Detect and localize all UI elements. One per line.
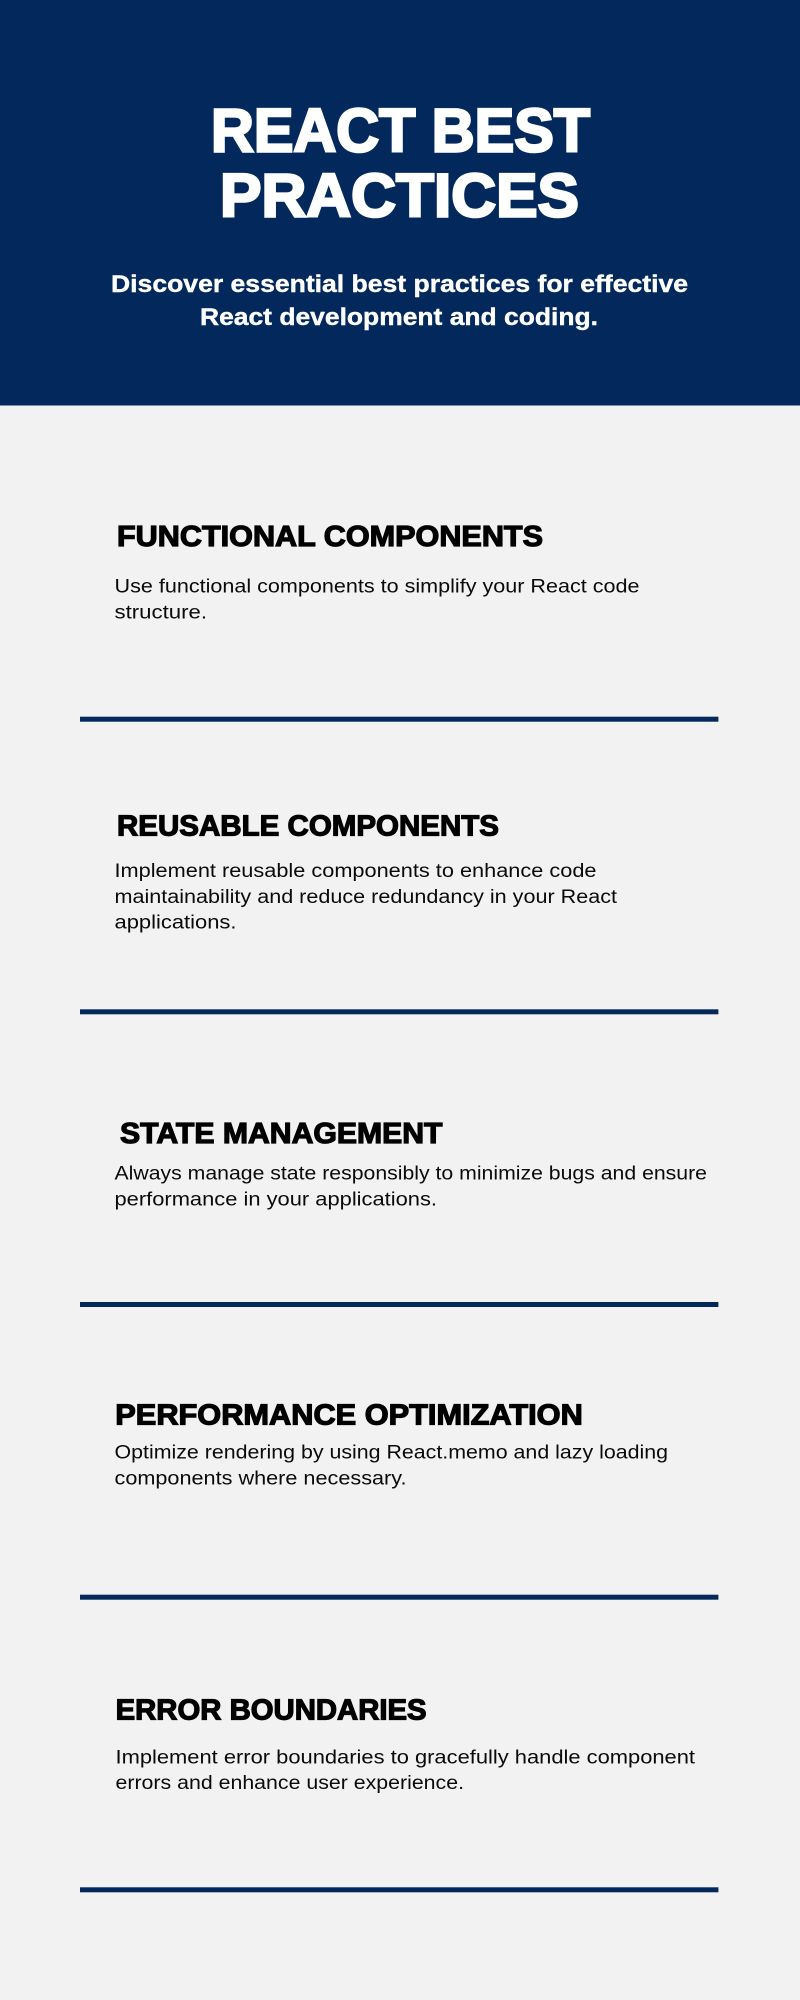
heading: performance optimization: PERFORMANCE OPTIMIZATION: [115, 1400, 583, 1432]
panel: functional components: [114, 521, 640, 623]
text: state management description: [114, 1163, 707, 1210]
subtitle: React development and coding.: [200, 304, 598, 331]
heading: functional components: FUNCTIONAL COMPONENTS: [117, 521, 543, 553]
text: performance optimization description: [114, 1442, 668, 1489]
heading: state management: STATE MANAGEMENT: [120, 1118, 443, 1150]
text: performance optimization description: Optimize rendering by using React.memo and lazy loading: [114, 1442, 668, 1463]
text: functional components description: [114, 576, 640, 623]
text: functional components description: Use functional components to simplify your React code: [114, 576, 640, 597]
heading: error boundaries: ERROR BOUNDARIES: [116, 1694, 427, 1726]
subtitle: [111, 271, 688, 331]
panel: state management: [114, 1118, 707, 1210]
heading: reusable components: REUSABLE COMPONENTS: [117, 810, 499, 842]
text: state management description: performance in your applications.: [114, 1189, 437, 1210]
title: [211, 96, 590, 230]
text: error boundaries description: Implement error boundaries to gracefully handle component: [116, 1747, 696, 1768]
text: reusable components description: maintainability and reduce redundancy in your React: [114, 887, 618, 908]
panel: error boundaries: [116, 1694, 696, 1794]
panel: performance optimization: [114, 1400, 668, 1489]
header banner: [0, 0, 800, 406]
text: reusable components description: applications.: [114, 913, 236, 934]
text: reusable components description: Implement reusable components to enhance code: [114, 861, 596, 882]
text: reusable components description: [114, 861, 618, 934]
text: performance optimization description: components where necessary.: [114, 1468, 406, 1489]
title: PRACTICES: [220, 162, 579, 230]
text: functional components description: structure.: [114, 602, 207, 623]
title: REACT BEST: [211, 96, 590, 164]
subtitle: Discover essential best practices for effective: [111, 271, 688, 298]
text: error boundaries description: [116, 1747, 696, 1794]
text: error boundaries description: errors and enhance user experience.: [116, 1773, 464, 1794]
panel: reusable components: [114, 810, 618, 934]
text: state management description: Always manage state responsibly to minimize bugs and ensure: [114, 1163, 707, 1184]
